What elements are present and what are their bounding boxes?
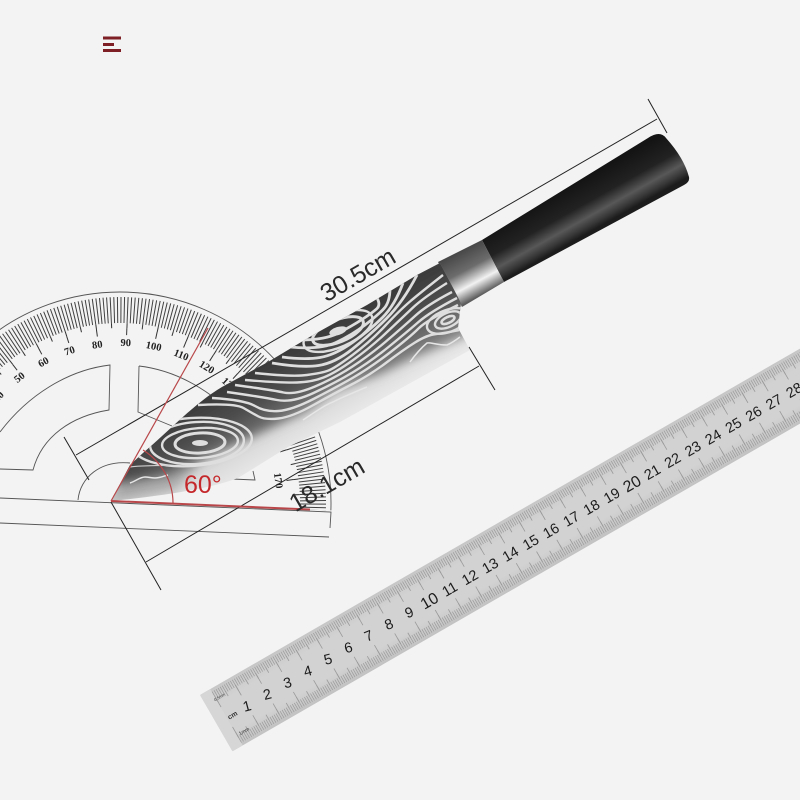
ruler numbers: 20 <box>621 473 645 496</box>
protractor degree labels: 60 <box>37 355 51 370</box>
red angle lines <box>111 328 310 510</box>
protractor degree ticks <box>0 292 332 510</box>
red angle arc <box>143 450 173 503</box>
protractor degree labels: 50 <box>12 370 27 386</box>
knife blade <box>112 263 470 500</box>
ruler top scale <box>214 321 800 702</box>
damascus rings near spine <box>290 290 392 354</box>
ruler bottom scale <box>235 358 800 739</box>
protractor degree labels: 70 <box>63 345 77 358</box>
ruler numbers: 17 <box>561 509 583 531</box>
protractor degree labels: 130 <box>219 376 238 394</box>
dimension line: blade length <box>111 347 495 590</box>
steel ruler <box>200 315 800 751</box>
red angle upper line <box>111 328 208 501</box>
knife handle <box>482 134 689 282</box>
ruler numbers: 14 <box>500 544 522 566</box>
ruler numbers: 2 <box>262 686 273 704</box>
protractor degree labels: 100 <box>145 340 162 354</box>
dimension line: overall length <box>64 99 667 480</box>
ruler numbers: 5 <box>322 651 334 669</box>
protractor degree labels: 170 <box>271 472 284 489</box>
ruler numbers: 3 <box>282 675 294 692</box>
protractor left window <box>0 365 110 470</box>
ruler numbers: 26 <box>743 403 765 425</box>
knife <box>100 134 689 510</box>
protractor degree labels: 80 <box>91 339 103 352</box>
protractor <box>0 292 332 538</box>
ruler numbers: 24 <box>703 427 725 449</box>
ruler numbers: 10 <box>418 590 442 613</box>
ruler unit labels <box>213 690 251 739</box>
ruler numbers: 11 <box>440 579 461 601</box>
ruler numbers: 1 <box>241 698 253 716</box>
protractor base lines <box>0 498 331 537</box>
ruler numbers: 12 <box>459 567 481 589</box>
knife bolster <box>438 240 504 307</box>
ruler numbers: 6 <box>343 640 355 657</box>
ruler numbers: 22 <box>662 450 684 472</box>
protractor degree labels: 90 <box>120 338 131 349</box>
ruler numbers: 19 <box>601 485 623 507</box>
ruler numbers: 27 <box>763 392 785 414</box>
ruler unit labels: 1mm <box>238 726 251 737</box>
damascus rings near tip <box>130 416 253 468</box>
blade length label: 18.1cm <box>284 452 370 518</box>
damascus rings near heel <box>426 307 460 335</box>
ruler numbers: 21 <box>642 462 664 484</box>
ruler numbers: 18 <box>581 497 603 519</box>
ruler numbers: 7 <box>362 628 376 646</box>
protractor inner arc <box>78 463 130 500</box>
protractor degree labels: 120 <box>197 359 216 377</box>
ruler numbers: 25 <box>723 415 745 437</box>
ruler numbers: 4 <box>302 663 314 681</box>
ruler numbers: 8 <box>382 616 396 634</box>
blade dark zone <box>118 263 466 490</box>
damascus flowing lines <box>198 275 460 419</box>
ruler numbers: 16 <box>540 520 562 542</box>
ruler unit labels: 0.5mm <box>213 691 227 702</box>
protractor right window <box>138 366 255 480</box>
red angle lower line <box>111 501 310 510</box>
overall length label: 30.5cm <box>315 242 401 308</box>
ruler numbers: 15 <box>520 532 542 554</box>
ruler left end <box>200 689 243 751</box>
damascus pattern <box>130 275 472 483</box>
protractor degree labels <box>0 338 284 489</box>
protractor degree labels: 110 <box>172 348 190 364</box>
angle label: 60° <box>184 471 222 499</box>
ruler numbers: 9 <box>403 604 416 622</box>
ruler body <box>200 315 800 751</box>
ruler numbers <box>238 379 800 718</box>
blade tip shade <box>113 467 198 500</box>
icon: menu bars <box>103 36 121 52</box>
ruler numbers: 13 <box>480 555 502 577</box>
ruler numbers: 23 <box>682 438 704 460</box>
damascus lower contours <box>303 387 367 420</box>
ruler unit labels: cm <box>227 710 239 721</box>
